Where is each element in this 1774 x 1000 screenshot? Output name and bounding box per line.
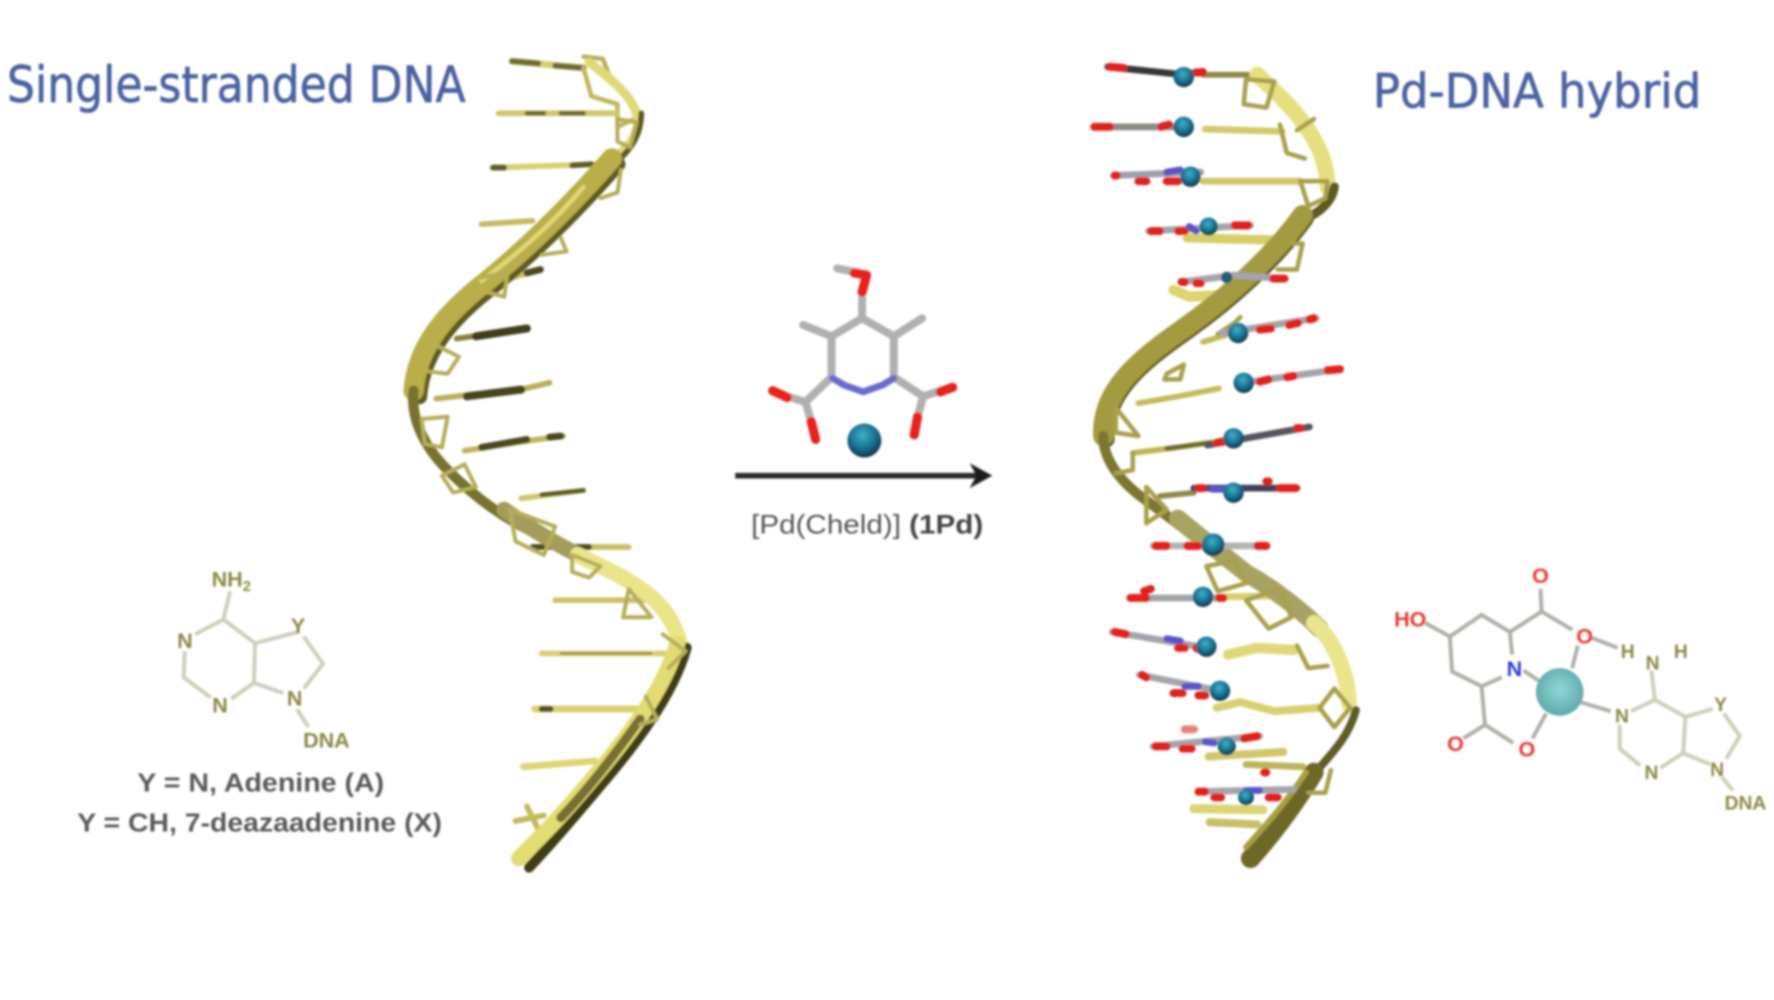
- adenine structure: [177, 568, 350, 752]
- adenine atom labels: Y: [291, 614, 305, 638]
- olive atom labels: H: [1621, 642, 1635, 663]
- olive atom labels: N: [1710, 760, 1724, 781]
- left helix sugar rings: [422, 119, 685, 725]
- caption: base definitions: Y = N, Adenine (A): [137, 768, 384, 798]
- olive atom labels: DNA: [1725, 794, 1766, 815]
- oxygen atoms: [773, 273, 953, 439]
- olive atom labels: H: [1674, 642, 1688, 663]
- palladium spheres: [1174, 67, 1254, 805]
- Pd-adenine complex structure: [1394, 564, 1766, 815]
- red and blue atom labels: O: [1576, 624, 1593, 648]
- adenine atom labels: N: [287, 687, 302, 711]
- ligand bonds: [1425, 589, 1617, 743]
- left helix bases: [436, 57, 668, 829]
- caption: base definitions: [77, 768, 442, 837]
- adenine ring bonds: [1620, 670, 1740, 790]
- red and blue atom labels: O: [1532, 564, 1549, 588]
- chelidamate carbon skeleton: [787, 268, 940, 421]
- right DNA helix: [1103, 75, 1356, 858]
- adenine atom labels: N: [212, 693, 228, 717]
- reagent label: [Pd(Cheld)] (1Pd): [751, 508, 983, 539]
- Pd-chelidamate complexes stacked on DNA: [1094, 67, 1340, 805]
- palladium centre: [1536, 668, 1583, 716]
- right helix backbone ribbon: [1103, 75, 1356, 858]
- olive atom labels: [1615, 642, 1766, 815]
- left helix backbone ribbon: [413, 62, 687, 867]
- adenine atom labels: N: [177, 629, 193, 653]
- olive atom labels: Y: [1714, 695, 1727, 716]
- red and blue atom labels: O: [1518, 738, 1535, 762]
- palladium atom: [847, 424, 881, 458]
- left DNA helix: [413, 57, 687, 867]
- title: Single-stranded DNA: Single-stranded DNA: [7, 56, 466, 114]
- red and blue atom labels: N: [1507, 657, 1522, 681]
- title: Pd-DNA hybrid: Pd-DNA hybrid: [1373, 65, 1701, 120]
- adenine atom labels: [177, 568, 350, 752]
- ligand oxygens: [1094, 67, 1340, 797]
- adenine atom labels: NH: [212, 568, 243, 592]
- adenine atom labels: 2: [243, 579, 251, 595]
- caption: base definitions: Y = CH, 7-deazaadenine (X): [77, 807, 442, 837]
- red and blue atom labels: [1394, 564, 1593, 762]
- red and blue atom labels: O: [1447, 732, 1464, 756]
- adenine atom labels: DNA: [303, 728, 350, 752]
- [Pd(Cheld)] molecule: [773, 268, 953, 458]
- pyridine nitrogen: [833, 378, 894, 392]
- right helix bases: [1133, 75, 1320, 824]
- right helix sugar rings: [1116, 79, 1350, 793]
- ligand nitrogens: [1167, 170, 1260, 790]
- ligand skeletons: [1094, 67, 1340, 792]
- olive atom labels: N: [1615, 707, 1629, 728]
- adenine bonds: [184, 591, 323, 727]
- red and blue atom labels: HO: [1394, 607, 1426, 631]
- reaction arrow: [735, 463, 992, 488]
- olive atom labels: N: [1644, 763, 1658, 784]
- olive atom labels: N: [1646, 653, 1660, 674]
